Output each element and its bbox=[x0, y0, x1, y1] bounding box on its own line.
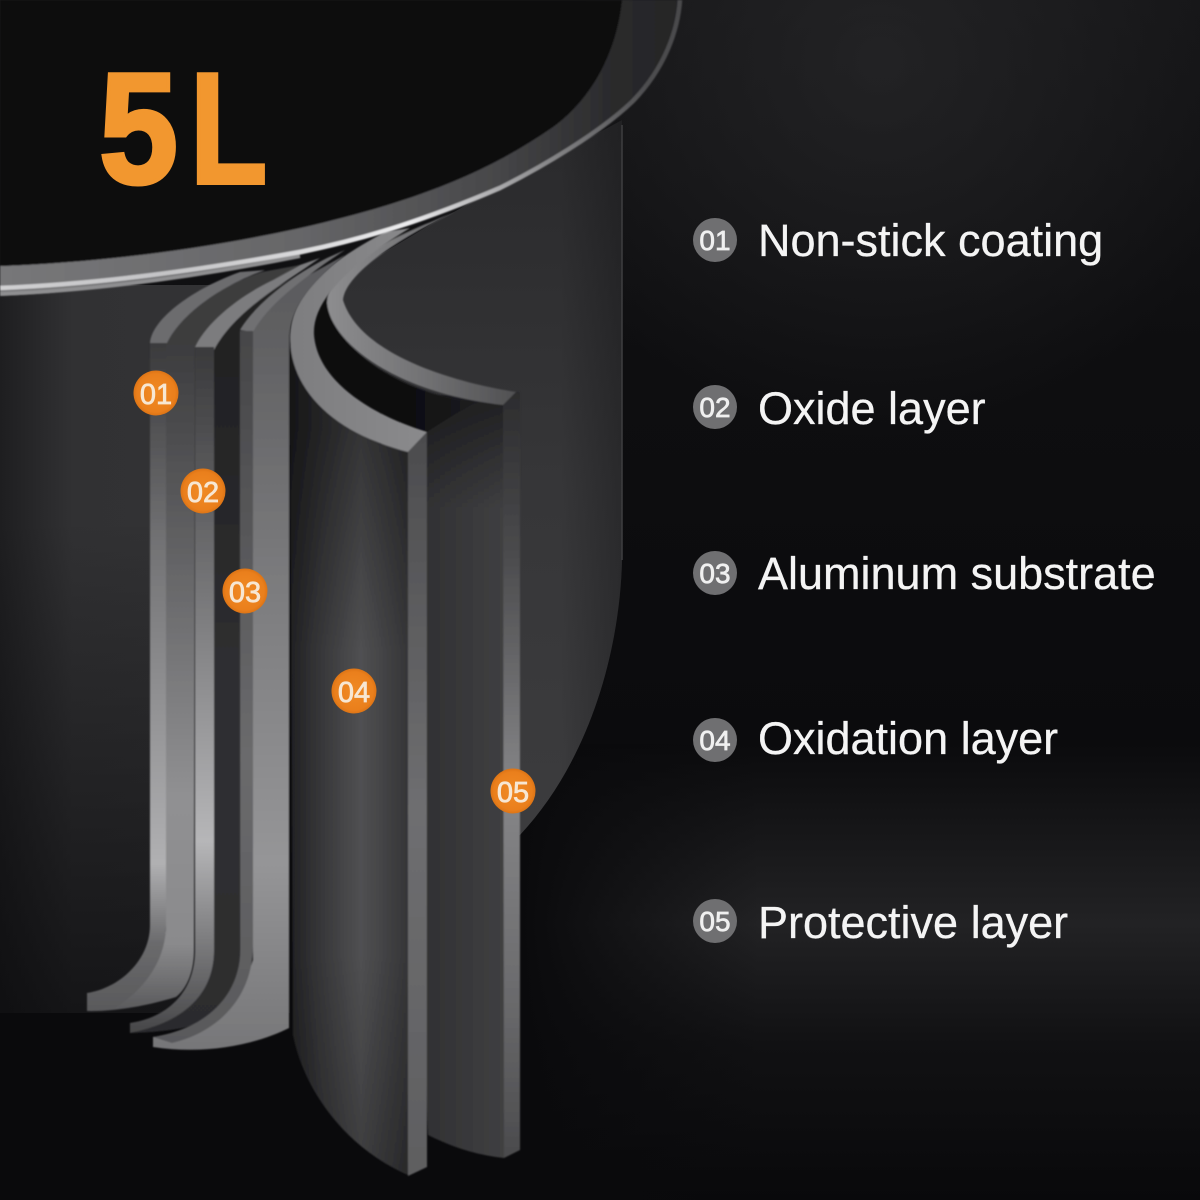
layer 1 curved band bbox=[150, 270, 265, 343]
rim highlight bbox=[0, 0, 680, 288]
layer 2 face bbox=[130, 255, 335, 1033]
legend item 02: 02 bbox=[699, 392, 731, 423]
layer 4 edge strip bbox=[408, 432, 427, 1176]
layer 3 face bbox=[153, 255, 345, 1050]
orange number badge 02: 02 bbox=[187, 477, 219, 509]
legend item 04: 04 bbox=[699, 725, 731, 756]
legend item 03: 03 bbox=[699, 558, 731, 589]
capacity label bbox=[99, 40, 267, 217]
orange number badge 03: 03 bbox=[229, 577, 261, 609]
layer 3 curved band bbox=[240, 250, 345, 332]
orange number badge 02 bbox=[180, 468, 226, 514]
orange number badge 03 bbox=[222, 568, 268, 614]
layer 5 edge strip bbox=[503, 392, 520, 1158]
orange number badge 04 bbox=[332, 668, 376, 714]
rim under-shine bbox=[0, 256, 300, 294]
legend item 02: Oxide layer bbox=[758, 383, 986, 434]
layer 4: oxidation layer bbox=[290, 228, 427, 1176]
layer 5: protective layer bbox=[314, 212, 520, 1158]
layer 4 curved band bbox=[290, 228, 427, 452]
orange number badge 01: 01 bbox=[140, 379, 172, 411]
layer 3: aluminum substrate bbox=[153, 250, 345, 1050]
pot interior bbox=[0, 0, 622, 266]
layer 1: non-stick coating bbox=[87, 265, 300, 1011]
layer 5 face bbox=[420, 400, 504, 1158]
orange number badge 05: 05 bbox=[497, 777, 529, 809]
legend item 01: Non-stick coating bbox=[758, 215, 1103, 266]
legend item 04: Oxidation layer bbox=[758, 713, 1058, 764]
black gap between bands bbox=[314, 222, 475, 432]
pot body bbox=[0, 120, 622, 1013]
layer 4 face bbox=[290, 345, 408, 1175]
capacity label: 5 bbox=[99, 40, 178, 217]
orange number badge 05 bbox=[490, 768, 536, 814]
pot interior and rim bbox=[0, 0, 681, 296]
capacity label: L bbox=[190, 41, 267, 217]
orange number badge 01 bbox=[134, 370, 178, 416]
legend item 03: Aluminum substrate bbox=[758, 548, 1156, 599]
layer 1 face bbox=[87, 265, 300, 1011]
layer 5 curved band bbox=[327, 212, 516, 405]
layer 2 curved band bbox=[195, 258, 320, 350]
layer 2 edge bbox=[130, 347, 214, 1033]
layer 2: oxide layer bbox=[130, 255, 335, 1033]
orange number badge 04: 04 bbox=[338, 677, 370, 709]
layer 1 edge bbox=[87, 343, 166, 1010]
layer 3 edge bbox=[153, 331, 253, 1043]
legend item 05: Protective layer bbox=[758, 897, 1068, 948]
rim band bbox=[0, 0, 681, 296]
legend item 01: 01 bbox=[699, 225, 731, 256]
legend item 05: 05 bbox=[699, 906, 731, 937]
